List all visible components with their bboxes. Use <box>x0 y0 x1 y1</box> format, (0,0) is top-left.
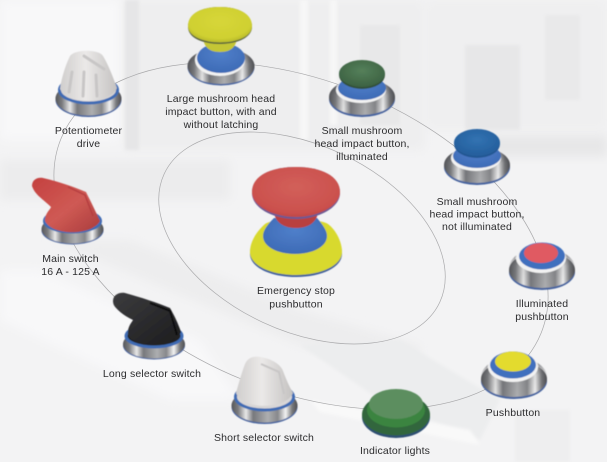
label: potentiometer drive: drive <box>77 138 100 150</box>
label: large mushroom head: impact button, with and <box>165 106 277 118</box>
label: long selector switch: Long selector switch <box>103 368 201 380</box>
icon: illuminated pushbutton <box>509 242 575 290</box>
icon: small mushroom not illuminated <box>444 129 510 185</box>
label: small mushroom illuminated: Small mushroom <box>322 125 402 137</box>
label: large mushroom head: without latching <box>183 119 258 131</box>
label: small mushroom not illuminated: not illuminated <box>442 221 512 233</box>
icon: small mushroom illuminated <box>329 60 395 117</box>
icon: potentiometer drive <box>56 51 122 117</box>
label: small mushroom illuminated: head impact button, <box>314 138 410 150</box>
label: illuminated pushbutton: Illuminated <box>516 298 568 310</box>
label: illuminated pushbutton: pushbutton <box>515 311 569 323</box>
icon: main switch <box>32 178 104 244</box>
label: potentiometer drive: Potentiometer <box>55 125 122 137</box>
label: emergency stop pushbutton: pushbutton <box>269 298 323 310</box>
label: small mushroom not illuminated: head impact button, <box>429 208 525 220</box>
icon: pushbutton <box>481 352 547 399</box>
icon: large mushroom head button <box>188 7 254 86</box>
label: small mushroom not illuminated: Small mushroom <box>437 196 517 208</box>
label: main switch: Main switch <box>42 253 99 265</box>
label: small mushroom illuminated: illuminated <box>336 151 388 163</box>
icon: long selector switch <box>113 293 185 360</box>
label: short selector switch: Short selector switch <box>214 432 314 444</box>
label: emergency stop pushbutton: Emergency stop <box>257 285 335 297</box>
inner orbit ring <box>125 89 479 387</box>
icon: emergency stop pushbutton <box>250 167 342 277</box>
label: main switch: 16 A - 125 A <box>41 266 100 278</box>
icon: short selector switch <box>232 357 298 424</box>
label: indicator lights: Indicator lights <box>360 445 430 457</box>
icon: indicator light <box>362 389 430 438</box>
label: large mushroom head: Large mushroom head <box>167 93 275 105</box>
label: pushbutton: Pushbutton <box>486 407 540 419</box>
